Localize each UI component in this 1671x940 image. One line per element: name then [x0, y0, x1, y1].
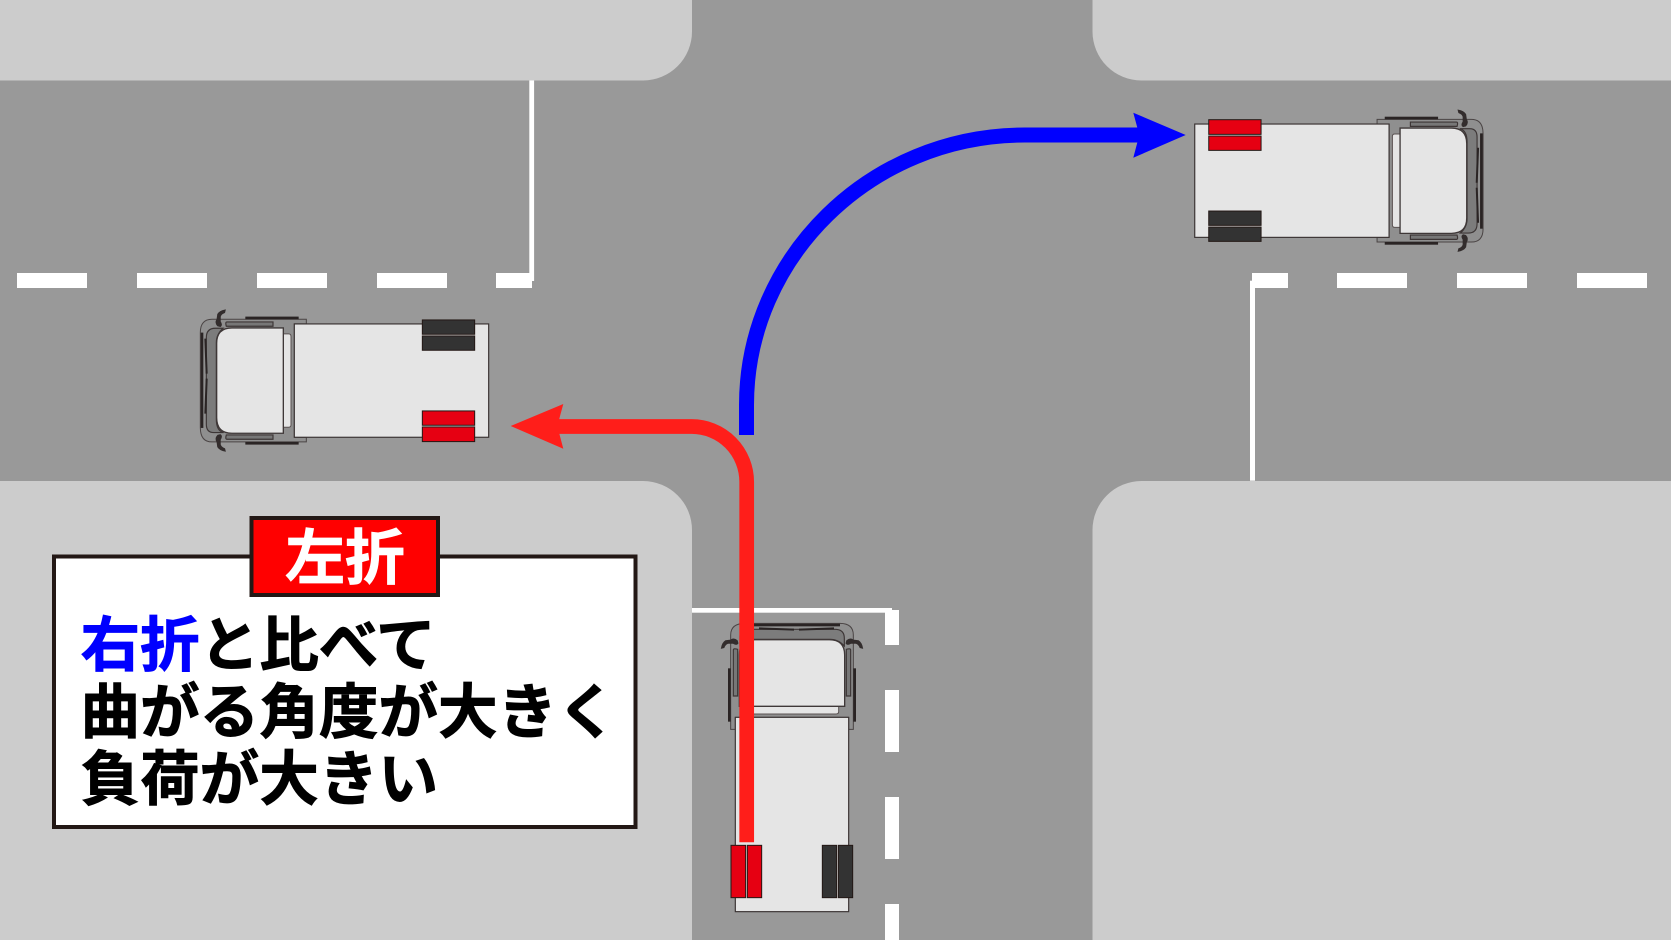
- arrow: red left-turn path: [511, 404, 747, 842]
- callout text: 右折: [80, 612, 200, 679]
- truck: after right turn: [1195, 110, 1483, 251]
- callout text: 負荷が大きい: [80, 746, 438, 813]
- truck: before turning: [721, 623, 863, 912]
- sidewalk: top left: [0, 0, 692, 80]
- sidewalk: bottom left: [0, 481, 692, 940]
- callout: left turn explanation: [54, 518, 636, 827]
- callout heading: left turn: [252, 518, 438, 595]
- callout heading: left turn: 左折: [285, 525, 405, 592]
- truck: after left turn: [200, 310, 489, 451]
- callout box: [54, 556, 636, 827]
- sidewalk: top right: [1092, 0, 1671, 80]
- sidewalk: bottom right: [1092, 481, 1671, 940]
- callout text: 曲がる角度が大きく: [80, 679, 617, 746]
- arrow: blue right-turn path: [746, 113, 1186, 435]
- callout text: と比べて: [200, 612, 436, 679]
